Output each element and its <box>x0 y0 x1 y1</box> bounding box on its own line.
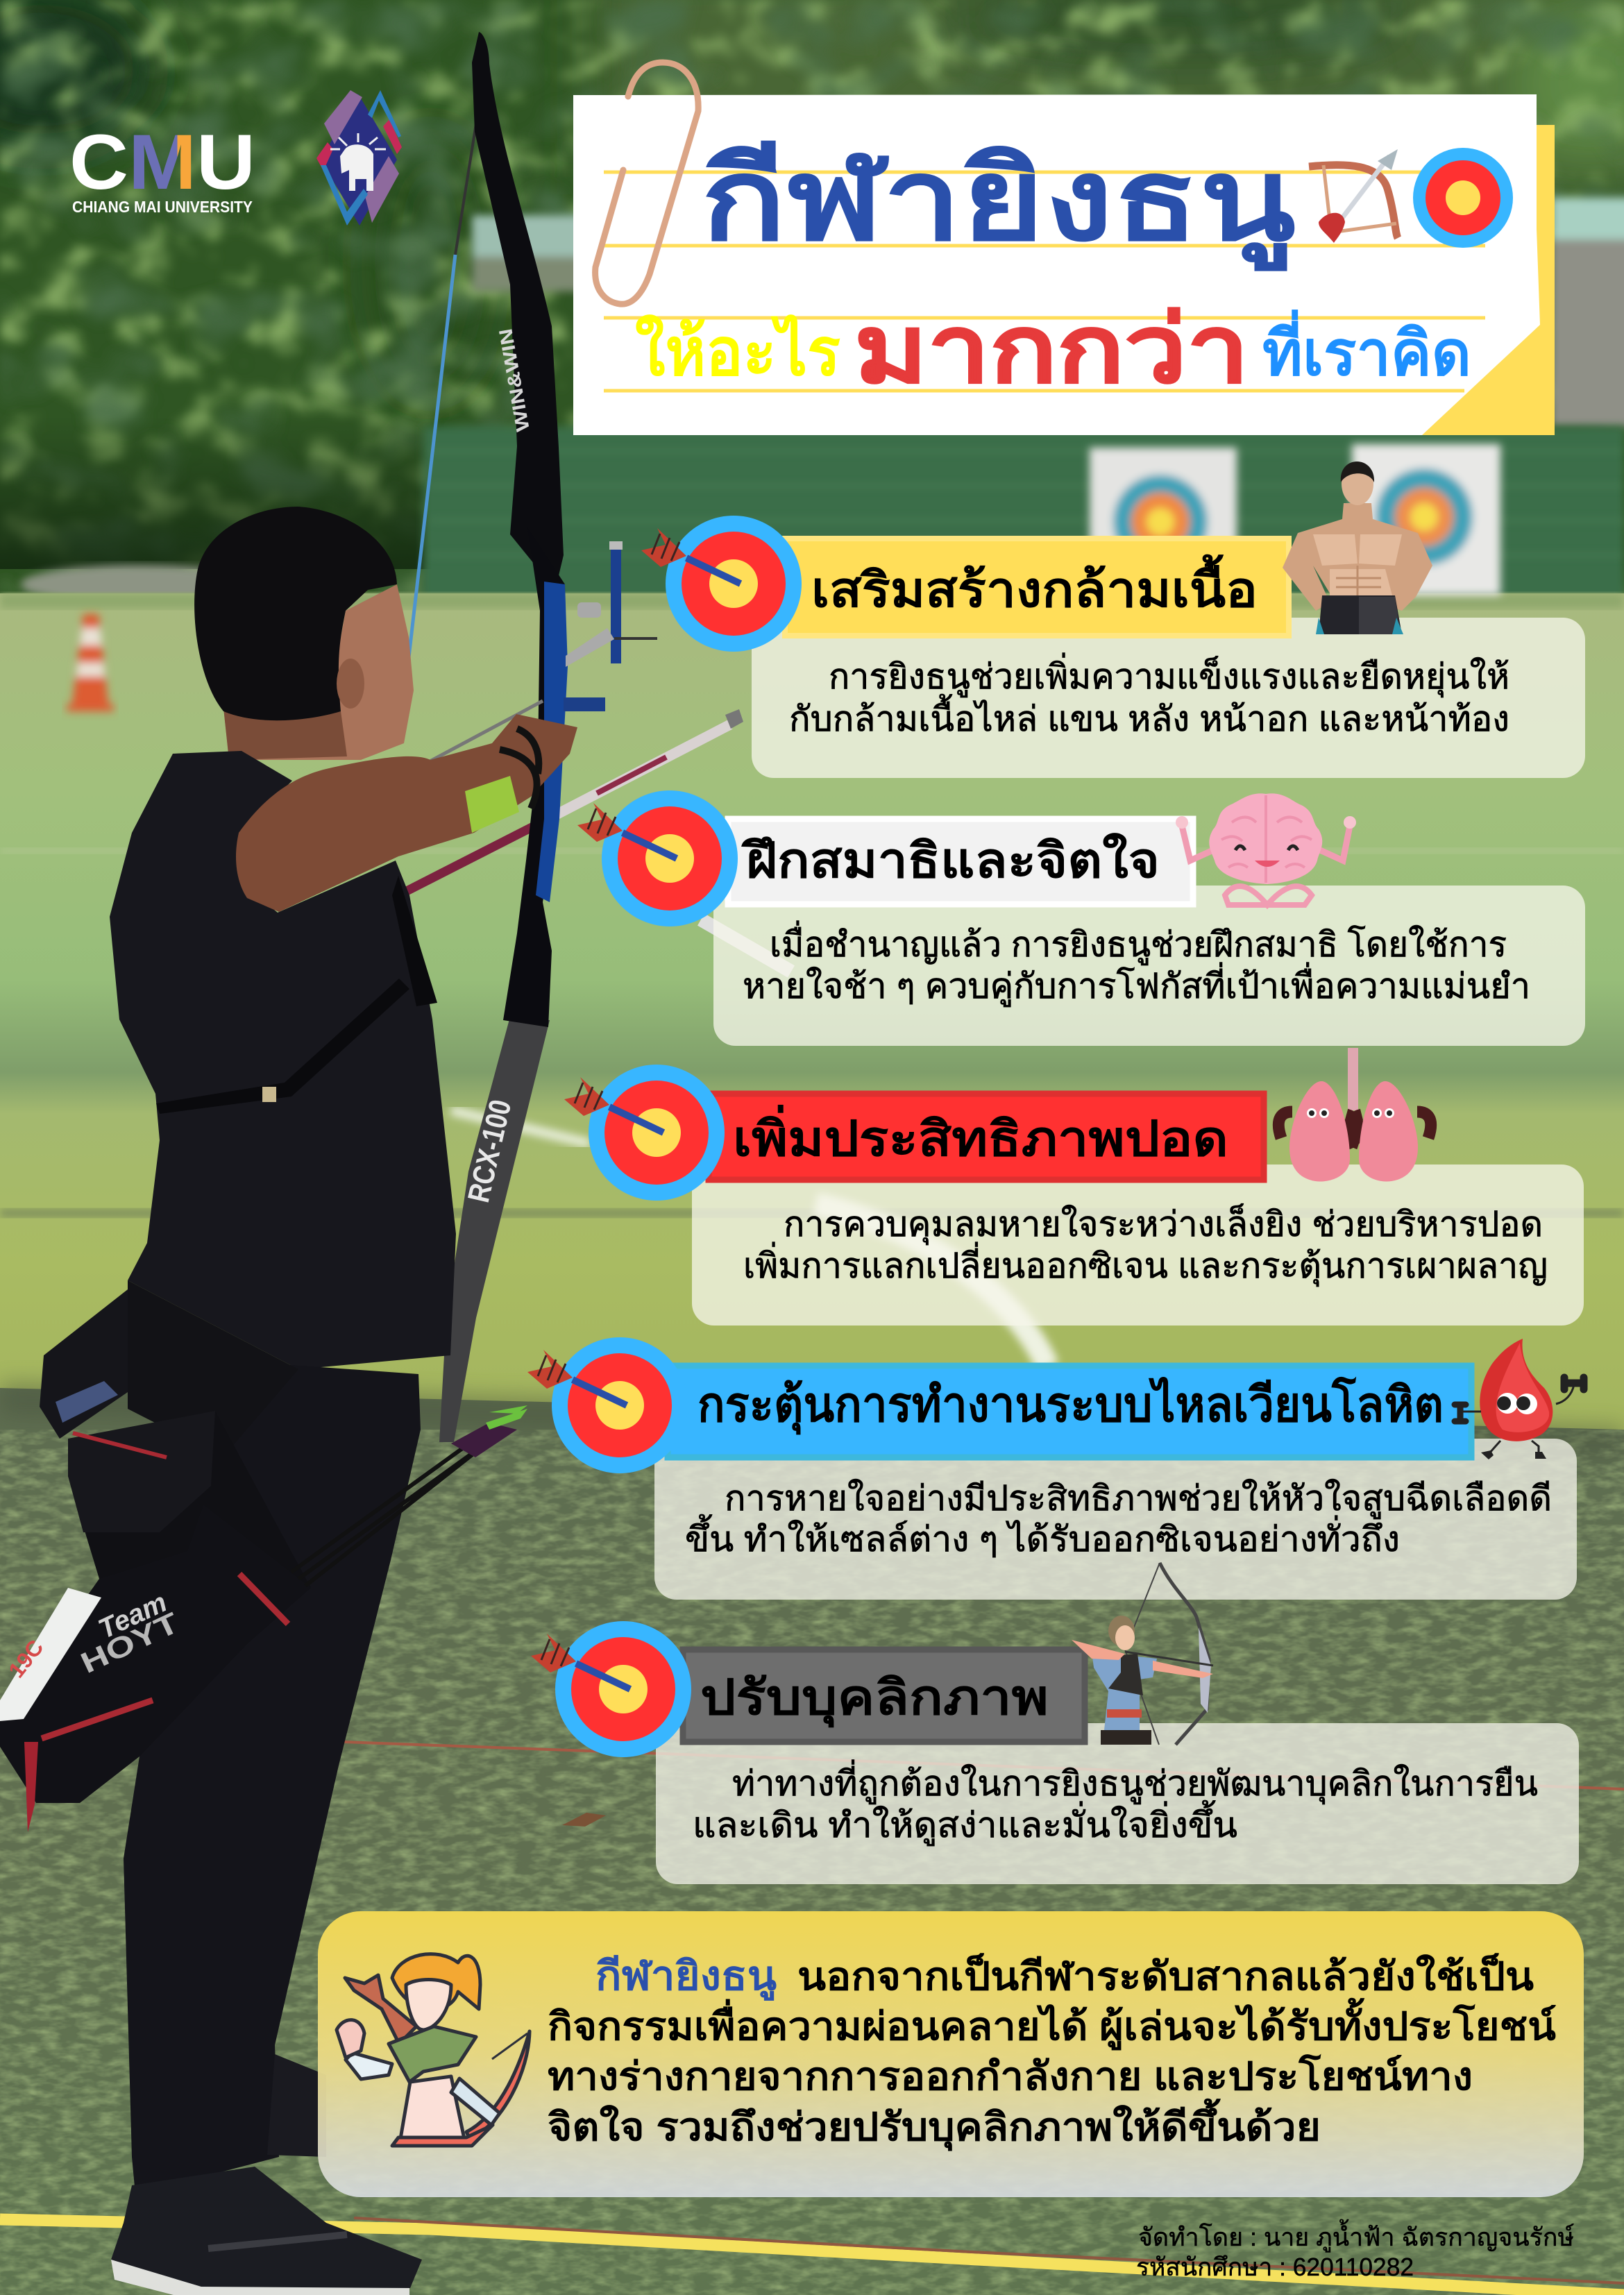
summary text <box>548 1952 1557 2151</box>
ear <box>337 659 364 709</box>
quiver brand: Team <box>94 1587 171 1645</box>
heading banner: lungs: เพิ่มประสิทธิภาพปอด <box>733 1104 1228 1166</box>
logo: Chiang Mai University: CHIANG MAI UNIVERSITY <box>72 198 253 216</box>
summary text: กีฬายิงธนู <box>595 1954 777 2001</box>
section 1: muscle <box>641 461 1585 778</box>
icon: target <box>1413 148 1513 248</box>
faded arrow tip behind panel <box>701 920 791 972</box>
panel: circulation text <box>654 1439 1577 1600</box>
panel: lungs text: เพิ่มการแลกเปลี่ยนออกซิเจน และกระตุ้นการเผาผลาญ <box>743 1242 1548 1287</box>
arm <box>236 714 577 912</box>
panel: personality text: ท่าทางที่ถูกต้องในการยิงธนูช่วยพัฒนาบุคลิกในการยืน <box>732 1760 1538 1804</box>
skin: face and neck <box>223 584 414 760</box>
panel: lungs text: การควบคุมลมหายใจระหว่างเล็งยิง ช่วยบริหารปอด <box>784 1203 1543 1245</box>
arm guard <box>465 729 539 833</box>
shirt <box>110 751 456 1369</box>
logo: elephant emblem <box>316 90 402 226</box>
bow string <box>408 62 486 663</box>
icon: target with arrow <box>564 1065 725 1201</box>
traffic cone <box>67 614 114 711</box>
summary text: นอกจากเป็นกีฬาระดับสากลแล้วยังใช้เป็น <box>797 1952 1534 1998</box>
trousers <box>124 1360 421 2194</box>
heading banner: focus: ฝึกสมาธิและจิตใจ <box>741 832 1160 888</box>
panel: muscle text: การยิงธนูช่วยเพิ่มความแข็งแรงและยืดหยุ่นให้ <box>829 653 1509 697</box>
hair <box>194 507 397 720</box>
heading banner: muscle: เสริมสร้างกล้ามเนื้อ <box>811 554 1258 617</box>
panel: circulation text: ขึ้น ทำให้เซลล์ต่าง ๆ ได้รับออกซิเจนอย่างทั่วถึง <box>685 1514 1400 1559</box>
title: subtitle right: ที่เราคิด <box>1262 310 1471 389</box>
panel: circulation text: การหายใจอย่างมีประสิทธิภาพช่วยให้หัวใจสูบฉีดเลือดดี <box>725 1479 1552 1519</box>
quiver brand: HOYT <box>76 1606 184 1679</box>
lower limb of bow: RCX-100 <box>462 1096 518 1205</box>
icon: strong lungs <box>1278 1048 1431 1182</box>
icon: cartoon girl archer <box>337 1954 530 2146</box>
ruled lines <box>604 172 1485 391</box>
panel: personality text: และเดิน ทำให้ดูสง่าและมั่นใจยิ่งขึ้น <box>693 1800 1237 1846</box>
panel: focus text <box>713 886 1585 1046</box>
heading banner: circulation: กระตุ้นการทำงานระบบไหลเวียนโลหิต <box>697 1376 1444 1435</box>
summary text: จิตใจ รวมถึงช่วยปรับบุคลิกภาพให้ดีขึ้นด้วย <box>548 2099 1321 2151</box>
front shoe <box>111 2167 422 2295</box>
icon: target with arrow <box>527 1337 688 1473</box>
icon: meditating brain <box>1176 793 1356 905</box>
icon: target with arrow <box>531 1621 691 1757</box>
title: main: กีฬายิงธนู <box>701 136 1296 271</box>
upper limb of bow: WIN&WIN <box>496 327 534 433</box>
icon: bow and arrow <box>1309 149 1398 243</box>
panel: lungs text <box>692 1165 1584 1326</box>
chest strap with buckle <box>156 876 437 1114</box>
quiver brand <box>76 1587 184 1679</box>
summary text: กิจกรรมเพื่อความผ่อนคลายได้ ผู้เล่นจะได้รับทั้งประโยชน์ <box>548 1998 1557 2051</box>
title: subtitle left: ให้อะไร <box>635 314 840 389</box>
riser <box>503 527 566 1027</box>
field boundary lines <box>0 2218 1624 2295</box>
section 3: lungs <box>564 1048 1584 1326</box>
photo: archer with bow <box>0 32 791 2194</box>
heading banner: circulation <box>668 1366 1471 1457</box>
section 2: focus and mind <box>577 790 1585 1046</box>
summary text: ทางร่างกายจากการออกกำลังกาย และประโยชน์ทาง <box>548 2053 1473 2098</box>
panel: personality text <box>656 1723 1579 1884</box>
icon: muscular man <box>1283 461 1432 634</box>
panel: muscle text: กับกล้ามเนื้อไหล่ แขน หลัง หน้าอก และหน้าท้อง <box>789 694 1509 738</box>
credit text <box>1136 2219 1574 2281</box>
heading banner: personality: ปรับบุคลิกภาพ <box>700 1670 1049 1728</box>
competitor tag <box>0 1588 101 1721</box>
heading banner: muscle <box>785 539 1289 636</box>
section 4: circulation <box>527 1337 1584 1600</box>
section 5: personality <box>531 1563 1579 1884</box>
credit text: จัดทำโดย : นาย ภูน้ำฟ้า ฉัตรกาญจนรักษ์ <box>1138 2219 1574 2253</box>
quiver arrows <box>291 1405 527 1586</box>
heading banner: focus <box>728 819 1193 904</box>
icon: target with arrow <box>641 516 802 652</box>
lower limb of bow <box>439 1017 550 1442</box>
stabiliser rod <box>403 709 743 893</box>
panel: muscle text <box>752 618 1585 778</box>
icon: target with arrow <box>577 790 738 926</box>
back shoe <box>267 2054 326 2157</box>
panel: focus text: เมื่อชำนาญแล้ว การยิงธนูช่วยฝึกสมาธิ โดยใช้การ <box>770 921 1507 965</box>
blurred target boards <box>1090 444 1500 600</box>
heading banner: lungs <box>709 1094 1264 1180</box>
heading banner: personality <box>683 1650 1085 1742</box>
title card <box>573 62 1555 435</box>
icon: small archer figure <box>1072 1563 1213 1745</box>
waist pouches and quiver <box>0 1280 311 1832</box>
sight <box>564 541 657 711</box>
paperclip <box>595 62 698 304</box>
icon: blood drop <box>1455 1339 1584 1459</box>
logo: Chiang Mai University: CMU <box>69 119 255 205</box>
panel: summary <box>318 1911 1584 2197</box>
upper limb of bow <box>472 32 564 590</box>
title: subtitle emphasis: มากกว่า <box>854 297 1249 402</box>
arrow shaft <box>423 701 543 765</box>
credit text: รหัสนักศึกษา : 620110282 <box>1136 2253 1414 2281</box>
panel: focus text: หายใจช้า ๆ ควบคู่กับการโฟกัสที่เป้าเพื่อความแม่นยำ <box>743 963 1530 1007</box>
competitor tag: 19C <box>3 1635 49 1682</box>
